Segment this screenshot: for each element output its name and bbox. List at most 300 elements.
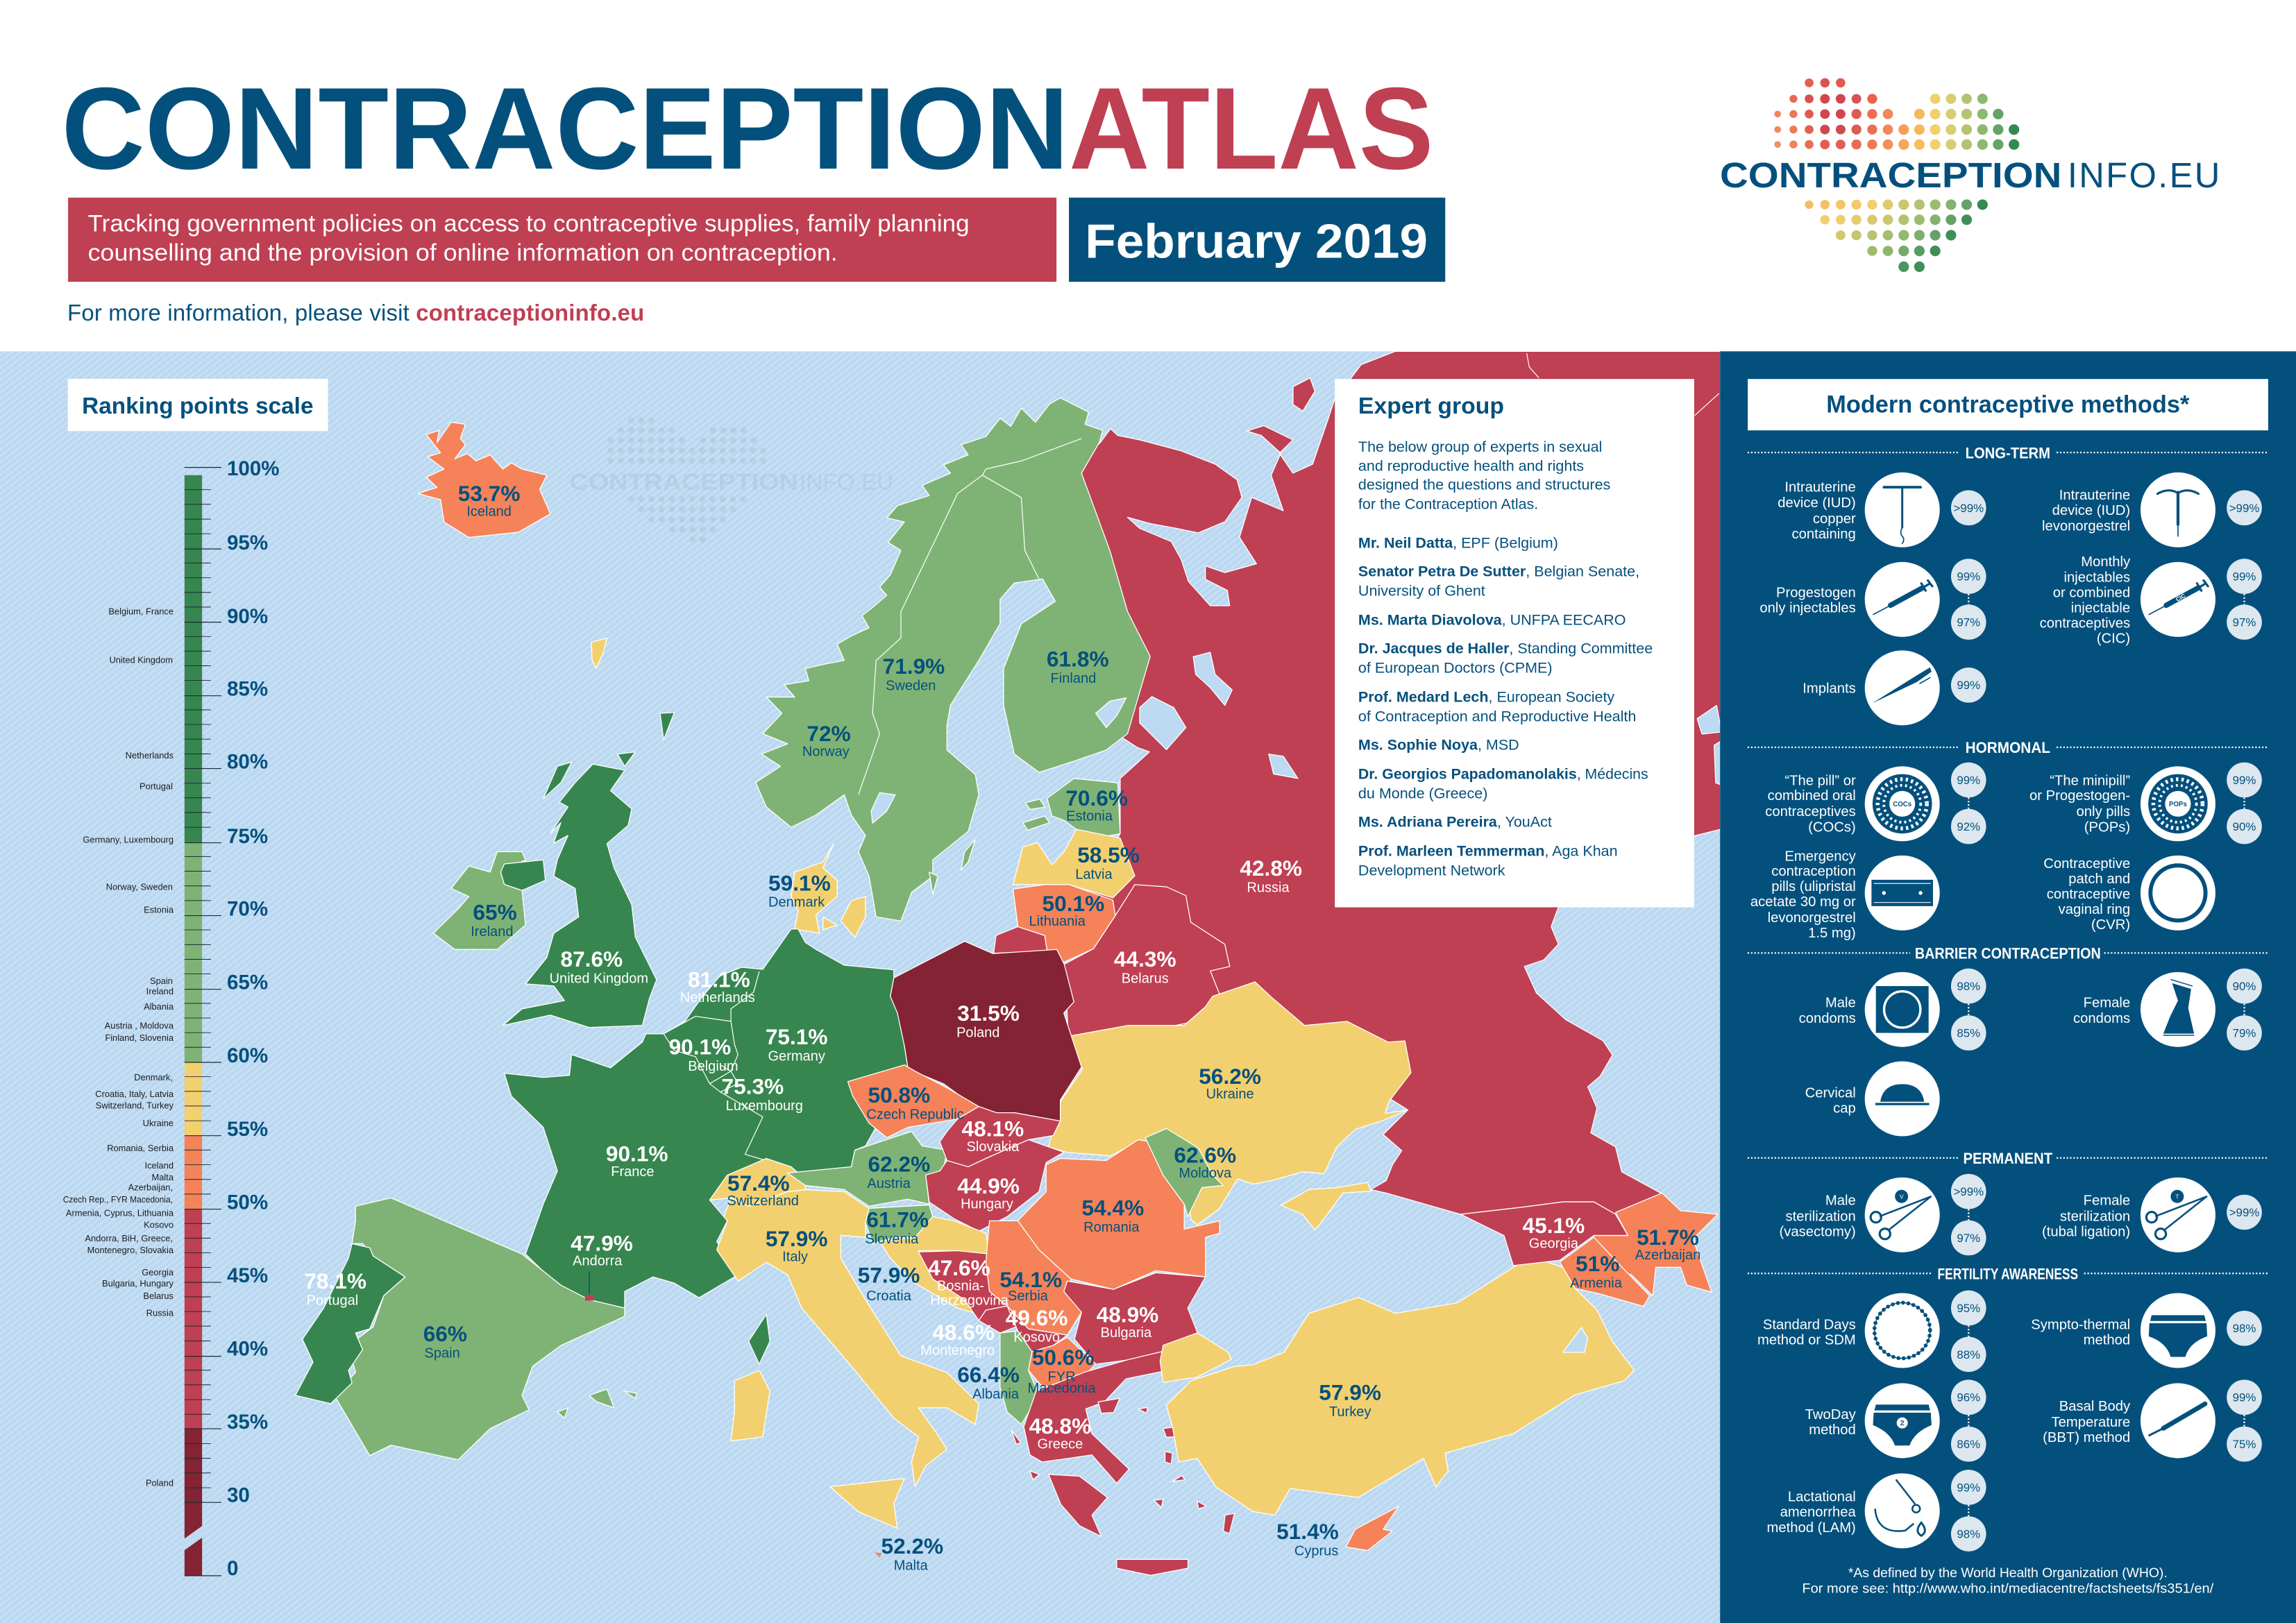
label: Latvia: 58.5%: [1077, 842, 1140, 867]
methods heading: [1748, 379, 2268, 430]
ranking points scale heading: Ranking points scale: [82, 393, 313, 419]
scale country labels: Estonia: [144, 905, 174, 915]
label: Andorra: 47.9%: [571, 1230, 633, 1255]
label: Slovenia: 61.7%: [866, 1207, 929, 1232]
scale country labels: Albania: [144, 1001, 174, 1012]
method: copper IUD: >99%: [1953, 502, 1984, 515]
label: Switzerland: 57.4%: [727, 1171, 790, 1196]
method: progestogen-only pills: POPs: [2169, 801, 2187, 808]
method: progestogen-only pills: [2029, 763, 2262, 844]
expert group members: Senator Petra De Sutter, Belgian Senate,: [1358, 563, 1639, 579]
label: FYR Macedonia: Macedonia: [1028, 1381, 1096, 1396]
method: male condoms: 98%: [1957, 980, 1980, 993]
central, western and southern Europe: [296, 929, 1223, 1557]
method: emergency contraception pills: levonorgestrel: [1768, 910, 1856, 926]
Corsica: [749, 1314, 770, 1364]
method: lactational amenorrhea: 98%: [1957, 1527, 1980, 1540]
label: Lithuania: Lithuania: [1029, 914, 1086, 929]
country: Andorra marker: [585, 1271, 593, 1300]
label: Albania: 66.4%: [957, 1362, 1020, 1387]
method: female sterilization: sterilization: [2060, 1209, 2130, 1224]
method: female condoms: 79%: [2233, 1026, 2256, 1039]
method: emergency contraception pills: 1.5 mg): [1808, 926, 1856, 941]
scale country labels: Germany, Luxembourg: [83, 835, 174, 845]
sea background: [0, 351, 1721, 1623]
label: Cyprus: 51.4%: [1276, 1519, 1339, 1544]
method: monthly injectables: injectables: [2063, 570, 2130, 586]
label: Turkey: [1319, 1379, 1381, 1420]
expert group members: of European Doctors (CPME): [1358, 659, 1553, 676]
method: levonorgestrel IUD: levonorgestrel: [2042, 519, 2130, 534]
ranking points scale bar: [182, 468, 221, 1576]
Sardinia: [731, 1370, 770, 1441]
method: standard days: method or SDM: [1757, 1333, 1856, 1348]
logo: contraceptioninfo.eu: CONTRACEPTION: [1720, 155, 2061, 195]
method: progestogen only injectables: [1759, 559, 1986, 640]
scale country labels: Finland, Slovenia: [105, 1033, 174, 1043]
Crimea: [1281, 1182, 1371, 1230]
scale country labels: Ukraine: [143, 1118, 174, 1128]
label: Norway: Norway: [802, 744, 850, 759]
country: Georgia: [1460, 1202, 1628, 1266]
label: Armenia: 51%: [1576, 1251, 1619, 1276]
method: monthly injectables: 97%: [2233, 616, 2256, 629]
method: two day: 86%: [1957, 1438, 1980, 1451]
Balearic Islands: [557, 1389, 636, 1418]
label: Portugal: Portugal: [307, 1293, 358, 1309]
label: Denmark: Denmark: [768, 895, 825, 910]
label: Russia: Russia: [1247, 881, 1290, 896]
title: CONTRACEPTION: [62, 63, 1069, 194]
label: Poland: [956, 1001, 1020, 1040]
label: Norway: [802, 721, 851, 759]
method: male sterilization: V: [1900, 1193, 1904, 1200]
method: progestogen-only pills: “The minipill”: [2050, 773, 2130, 788]
method: male sterilization: 97%: [1957, 1232, 1980, 1245]
label: Russia: 42.8%: [1240, 856, 1302, 881]
label: Estonia: Estonia: [1066, 808, 1113, 824]
country: Romania: [1018, 1140, 1219, 1289]
scale percentage labels: 55%: [227, 1118, 268, 1141]
method: implants: Implants: [1803, 681, 1856, 696]
label: Croatia: Croatia: [866, 1289, 912, 1304]
label: Germany: 75.1%: [766, 1024, 828, 1049]
method: patch and vaginal ring: contraceptive: [2047, 887, 2130, 902]
ranking points scale heading: [68, 379, 328, 431]
label: Serbia: [999, 1267, 1062, 1304]
label: Luxembourg: 75.3%: [722, 1074, 784, 1099]
method: implants: [1803, 650, 1986, 725]
method: combined oral contraceptives: contraceptives: [1765, 804, 1856, 819]
scale country labels: Belarus: [143, 1291, 174, 1301]
panel: modern contraceptive methods: [1720, 351, 2296, 1623]
label: Turkey: 57.9%: [1319, 1379, 1381, 1404]
label: Malta: 52.2%: [881, 1533, 943, 1558]
scale country labels: Andorra, BiH, Greece,: [85, 1233, 173, 1243]
subtitle banner: Tracking government policies on access to contraceptive supplies, family planning: [88, 210, 970, 237]
method: copper IUD: containing: [1791, 527, 1856, 542]
label: Romania: [1082, 1196, 1144, 1235]
expert group members: Ms. Marta Diavolova, UNFPA EECARO: [1358, 611, 1626, 628]
country: Czech Republic: [847, 1065, 979, 1138]
scale percentage labels: 0: [227, 1557, 238, 1580]
method: progestogen-only pills: 99%: [2233, 774, 2256, 787]
scale country labels: Czech Rep., FYR Macedonia,: [63, 1194, 173, 1205]
scale country labels: Austria , Moldova: [105, 1021, 174, 1031]
method: male condoms: condoms: [1799, 1011, 1856, 1026]
section heading: long-term: LONG-TERM: [1966, 444, 2050, 461]
label: Denmark: 59.1%: [768, 870, 831, 895]
label: Switzerland: [727, 1171, 799, 1209]
method: female condoms: [2073, 969, 2262, 1051]
label: Germany: [766, 1024, 828, 1064]
label: Belarus: Belarus: [1122, 971, 1169, 986]
label: Finland: [1047, 647, 1109, 686]
method: levonorgestrel IUD: Intrauterine: [2059, 488, 2130, 503]
label: Slovenia: [865, 1207, 929, 1247]
method: basal body temperature: 99%: [2233, 1391, 2256, 1404]
Finnish lake cluster: [1096, 698, 1126, 728]
label: Bosnia-Herzegovina: [928, 1255, 1009, 1309]
method: male sterilization: sterilization: [1786, 1209, 1856, 1224]
scale country labels: Bulgaria, Hungary: [102, 1278, 174, 1289]
method: sympto-thermal: method: [2084, 1333, 2130, 1348]
country: Albania: [1000, 1331, 1039, 1425]
country: Malta: [875, 1552, 881, 1557]
method: lactational amenorrhea: 99%: [1957, 1481, 1980, 1494]
label: Greece: 48.8%: [1029, 1413, 1091, 1438]
country: Croatia: [879, 1216, 990, 1316]
expert group members: Ms. Sophie Noya, MSD: [1358, 736, 1519, 753]
country: United Kingdom: [503, 764, 657, 1028]
method: female sterilization: >99%: [2229, 1206, 2259, 1219]
method: standard days: 88%: [1957, 1348, 1980, 1361]
expert group members: University of Ghent: [1358, 582, 1485, 599]
method: monthly injectables: contraceptives: [2040, 616, 2130, 631]
scale country labels: Azerbaijan,: [128, 1182, 173, 1193]
country: Turkey: [1160, 1257, 1634, 1515]
label: Malta: Malta: [894, 1558, 929, 1573]
scale percentage labels: 70%: [227, 898, 268, 921]
label: Austria: 62.2%: [868, 1151, 930, 1176]
label: Albania: Albania: [972, 1387, 1020, 1402]
label: Portugal: 78.1%: [304, 1268, 366, 1293]
country: Ireland: [434, 852, 525, 949]
label: United Kingdom: [550, 946, 648, 986]
expert group members: [1358, 534, 1653, 879]
scale country labels: Spain: [150, 976, 173, 986]
title: ATLAS: [1069, 63, 1433, 194]
logo: contraceptioninfo.eu: INFO.EU: [2068, 155, 2220, 195]
label: Bosnia-Herzegovina: Herzegovina: [930, 1293, 1009, 1309]
label: Serbia: 54.1%: [999, 1267, 1062, 1292]
label: Belgium: Belgium: [688, 1059, 738, 1074]
footnote: [1802, 1565, 2214, 1596]
label: Sweden: 71.9%: [883, 654, 945, 679]
scale country labels: Norway, Sweden: [106, 882, 173, 892]
label: Bosnia-Herzegovina: 47.6%: [928, 1255, 990, 1280]
label: Finland: Finland: [1051, 671, 1096, 686]
label: Serbia: Serbia: [1008, 1289, 1049, 1304]
scale country labels: Poland: [146, 1477, 174, 1488]
method: male sterilization: Male: [1825, 1193, 1856, 1208]
label: Norway: 72%: [807, 721, 851, 746]
label: Kosovo: [1006, 1305, 1068, 1345]
panel: expert group: [1335, 379, 1694, 908]
method: two day: TwoDay: [1805, 1407, 1857, 1422]
method: emergency contraception pills: Emergency: [1784, 849, 1857, 864]
label: Latvia: Latvia: [1075, 867, 1113, 883]
label: Croatia: [858, 1263, 920, 1304]
label: Armenia: Armenia: [1570, 1275, 1623, 1291]
scale percentage labels: [227, 457, 280, 1580]
country: Montenegro: [979, 1306, 1021, 1333]
country: Serbia: [986, 1221, 1081, 1335]
country: Spain: [335, 1198, 625, 1460]
label: Iceland: 53.7%: [458, 481, 520, 506]
country: Austria: [788, 1132, 947, 1206]
scale country labels: Romania, Serbia: [107, 1143, 174, 1153]
country: Latvia: [1013, 829, 1135, 898]
label: Hungary: 44.9%: [957, 1173, 1020, 1198]
country: Kaliningrad (Russia): [994, 926, 1047, 953]
label: Ukraine: Ukraine: [1206, 1087, 1254, 1102]
method: male sterilization: (vasectomy): [1780, 1224, 1856, 1239]
label: Austria: [867, 1151, 930, 1191]
scale country labels: United Kingdom: [109, 654, 173, 665]
country: Poland: [890, 942, 1081, 1121]
expert group introduction: and reproductive health and rights: [1358, 457, 1584, 474]
scale percentage labels: 90%: [227, 605, 268, 628]
scale percentage labels: 45%: [227, 1264, 268, 1287]
method: male sterilization: [1780, 1174, 1986, 1255]
label: Romania: Romania: [1083, 1220, 1140, 1235]
label: Italy: 57.9%: [766, 1226, 828, 1251]
label: Denmark: [768, 870, 831, 910]
label: Poland: 31.5%: [957, 1001, 1020, 1026]
country: Russia: [1062, 351, 1721, 1220]
expert group members: du Monde (Greece): [1358, 785, 1487, 801]
Scottish islands: [543, 713, 674, 799]
country: Belarus: [1064, 885, 1230, 1046]
label: Luxembourg: [722, 1074, 803, 1114]
section heading: barrier contraception: BARRIER CONTRACEPTION: [1915, 945, 2101, 962]
method: monthly injectables: [2040, 554, 2262, 647]
method: combined oral contraceptives: “The pill” or: [1784, 773, 1856, 788]
label: Montenegro: [920, 1320, 995, 1358]
label: Greece: Greece: [1038, 1436, 1083, 1452]
date box: [1069, 198, 1445, 282]
label: Georgia: [1523, 1213, 1585, 1251]
label: Cyprus: Cyprus: [1294, 1543, 1338, 1558]
method: combined oral contraceptives: 92%: [1957, 820, 1980, 833]
method: implants: 99%: [1957, 679, 1980, 692]
label: FYR Macedonia: [1028, 1345, 1096, 1396]
label: Netherlands: Netherlands: [680, 990, 755, 1005]
Northern Ireland: [500, 860, 546, 890]
scale country labels: Montenegro, Slovakia: [87, 1245, 174, 1255]
label: Georgia: Georgia: [1529, 1236, 1579, 1251]
method: cervical cap: Cervical: [1805, 1086, 1856, 1101]
country: Armenia: [1560, 1237, 1650, 1307]
label: Montenegro: 48.6%: [932, 1320, 995, 1345]
Russian lakes and islands: [1140, 353, 1721, 785]
scale country labels: Ireland: [146, 986, 174, 996]
method: monthly injectables: CIC: [2175, 592, 2187, 603]
scale percentage labels: 85%: [227, 678, 268, 701]
method: basal body temperature: Temperature: [2051, 1415, 2130, 1430]
method: monthly injectables: (CIC): [2097, 631, 2130, 647]
scale country labels: Netherlands: [126, 750, 174, 760]
scale country labels: Switzerland, Turkey: [96, 1101, 174, 1111]
method: patch and vaginal ring: Contraceptive: [2043, 856, 2130, 872]
method: monthly injectables: injectable: [2071, 600, 2130, 615]
scale percentage labels: 65%: [227, 971, 268, 994]
expert group introduction: for the Contraception Atlas.: [1358, 495, 1538, 512]
method: copper IUD: device (IUD): [1778, 495, 1856, 511]
label: Spain: 66%: [423, 1321, 467, 1346]
scale country labels: Georgia: [142, 1267, 174, 1277]
label: Slovenia: Slovenia: [865, 1232, 919, 1247]
method: patch and vaginal ring: patch and: [2068, 872, 2130, 887]
label: Ireland: 65%: [473, 900, 517, 925]
expert group introduction: The below group of experts in sexual: [1358, 439, 1602, 455]
expert group members: Prof. Medard Lech, European Society: [1358, 688, 1614, 705]
method: lactational amenorrhea: method (LAM): [1767, 1520, 1856, 1536]
expert group introduction: [1358, 439, 1610, 512]
label: Germany: Germany: [768, 1048, 825, 1064]
method: female sterilization: Female: [2084, 1193, 2130, 1208]
method: female condoms: Female: [2084, 996, 2130, 1011]
south-eastern Europe: [1011, 1182, 1718, 1575]
method: lactational amenorrhea: [1767, 1470, 1986, 1552]
label: Estonia: 70.6%: [1065, 785, 1128, 810]
country: North Macedonia: [1029, 1337, 1096, 1387]
label: Lithuania: [1029, 891, 1104, 929]
method: cervical cap: [1805, 1062, 1940, 1137]
method: two day: 96%: [1957, 1391, 1980, 1404]
scale percentage labels: 95%: [227, 532, 268, 554]
method: combined oral contraceptives: (COCs): [1808, 820, 1856, 835]
scale country labels: Portugal: [140, 781, 173, 792]
method: patch and vaginal ring: vaginal ring: [2059, 902, 2130, 917]
country: Norway, Sweden and Finland: [756, 398, 1150, 921]
label: Slovakia: Slovakia: [967, 1139, 1020, 1155]
scale country labels: Armenia, Cyprus, Lithuania: [66, 1208, 174, 1218]
label: Lithuania: 50.1%: [1043, 891, 1104, 916]
label: Malta: [881, 1533, 943, 1573]
country: Kosovo: [1007, 1306, 1067, 1352]
scale percentage labels: 100%: [227, 457, 280, 480]
label: Sweden: Sweden: [886, 679, 936, 694]
scale percentage labels: 50%: [227, 1191, 268, 1214]
method: female condoms: condoms: [2073, 1011, 2130, 1026]
label: Spain: Spain: [425, 1346, 460, 1361]
method: monthly injectables: Monthly: [2081, 554, 2131, 570]
Baltic states and Belarus: [994, 779, 1230, 1046]
label: Kosovo: 49.6%: [1006, 1305, 1068, 1330]
method: emergency contraception pills: acetate 30 mg or: [1750, 894, 1856, 910]
label: Turkey: Turkey: [1329, 1404, 1371, 1420]
method: sympto-thermal: 98%: [2233, 1322, 2256, 1335]
method: lactational amenorrhea: Lactational: [1788, 1490, 1856, 1505]
method: emergency contraception pills: pills (ulipristal: [1771, 879, 1856, 894]
methods heading: Modern contraceptive methods*: [1826, 391, 2190, 418]
watermark logo: INFO.EU: [800, 469, 893, 494]
method: male condoms: Male: [1825, 996, 1856, 1011]
label: Iceland: Iceland: [466, 504, 512, 519]
scale country labels: Malta: [152, 1172, 174, 1182]
method: copper IUD: [1778, 473, 1986, 547]
label: Czech Republic: Czech Republic: [866, 1107, 964, 1123]
more information link: For more information, please visit contraceptioninfo.eu: [67, 300, 644, 325]
country: Switzerland: [709, 1159, 805, 1206]
scale percentage labels: 75%: [227, 825, 268, 848]
label: Latvia: [1075, 842, 1140, 883]
scale country labels: Belgium, France: [108, 606, 174, 616]
label: Romania: 54.4%: [1082, 1196, 1144, 1221]
section heading: permanent: PERMANENT: [1963, 1150, 2053, 1167]
label: Iceland: [458, 481, 520, 519]
label: Hungary: [957, 1173, 1020, 1212]
label: Netherlands: 81.1%: [688, 967, 750, 992]
method: progestogen only injectables: only injectables: [1759, 600, 1856, 615]
label: FYR Macedonia: FYR: [1047, 1369, 1076, 1384]
label: Andorra: Andorra: [573, 1254, 623, 1269]
method: levonorgestrel IUD: [2042, 473, 2262, 547]
label: Cyprus: [1276, 1519, 1339, 1558]
method: basal body temperature: 75%: [2233, 1438, 2256, 1451]
method: progestogen-only pills: (POPs): [2084, 820, 2130, 835]
scale country labels: [63, 606, 174, 1488]
label: Poland: Poland: [956, 1025, 999, 1040]
label: Moldova: [1174, 1143, 1236, 1181]
method: male condoms: [1799, 969, 1986, 1051]
method: male condoms: 85%: [1957, 1026, 1980, 1039]
logo: contraceptioninfo.eu: [1720, 78, 2220, 272]
label: France: 90.1%: [606, 1141, 668, 1166]
label: Belarus: [1114, 946, 1176, 986]
scale percentage labels: 30: [227, 1484, 250, 1507]
label: Azerbaijan: 51.7%: [1637, 1225, 1699, 1250]
method: standard days: [1757, 1291, 1986, 1372]
label: Azerbaijan: [1635, 1225, 1700, 1263]
label: Belgium: 90.1%: [669, 1035, 731, 1060]
label: United Kingdom: 87.6%: [560, 946, 623, 971]
expert group introduction: designed the questions and structures: [1358, 476, 1610, 493]
method: female sterilization: (tubal ligation): [2042, 1224, 2130, 1239]
label: Slovakia: [962, 1116, 1024, 1155]
method: combined oral contraceptives: combined oral: [1768, 788, 1856, 804]
label: Andorra: [571, 1230, 633, 1269]
method: cervical cap: cap: [1833, 1101, 1856, 1116]
country: Ukraine: [1049, 982, 1411, 1225]
country: Iceland: [418, 423, 550, 538]
watermark logo: CONTRACEPTION: [570, 469, 798, 494]
label: Italy: [766, 1226, 828, 1264]
label: Ukraine: [1199, 1064, 1261, 1102]
method: male sterilization: >99%: [1953, 1185, 1984, 1198]
method: lactational amenorrhea: amenorrhea: [1780, 1504, 1857, 1520]
expert group members: Dr. Jacques de Haller, Standing Committee: [1358, 640, 1653, 656]
method: basal body temperature: Basal Body: [2059, 1399, 2131, 1414]
subtitle banner: counselling and the provision of online information on contraception.: [88, 240, 838, 266]
expert group members: Dr. Georgios Papadomanolakis, Médecins: [1358, 765, 1648, 782]
map of Europe: [296, 351, 1721, 1575]
method: progestogen-only pills: 90%: [2233, 820, 2256, 833]
section heading: hormonal: HORMONAL: [1966, 739, 2050, 756]
method: female condoms: 90%: [2233, 980, 2256, 993]
